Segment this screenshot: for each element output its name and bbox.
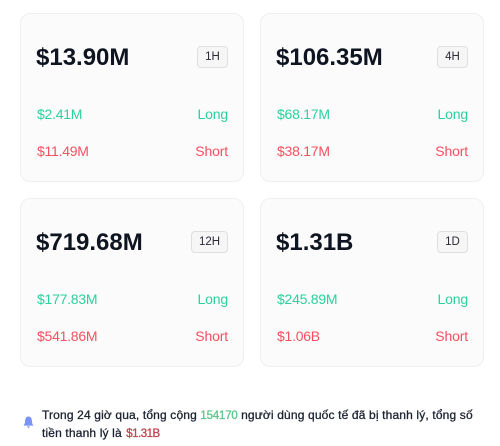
total 4H: $106.35M — [276, 44, 383, 71]
panel: 4H liquidations — [260, 13, 484, 182]
short row 12H: $541.86M — [37, 328, 97, 344]
summary note: Trong 24 giờ qua, tổng cộng 154170 người dùng quốc tế đã bị thanh lý, tổng số — [42, 408, 473, 422]
badge 4H — [437, 46, 468, 68]
total 1H: $13.90M — [36, 44, 129, 71]
long row 4H: Long — [437, 106, 468, 122]
short row 4H: Short — [435, 143, 468, 159]
badge 1D: 1D — [445, 236, 460, 248]
long row 1H: Long — [197, 106, 228, 122]
long row 1H: $2.41M — [37, 106, 82, 122]
long row 1D — [277, 291, 468, 307]
short row 1H: Short — [195, 143, 228, 159]
total 1D: $1.31B — [276, 229, 353, 256]
badge 1D — [437, 231, 468, 253]
short row 1D — [277, 328, 468, 344]
total 12H: $719.68M — [36, 229, 143, 256]
badge 12H: 12H — [199, 236, 220, 248]
long row 1D: Long — [437, 291, 468, 307]
long row 1D: $245.89M — [277, 291, 337, 307]
long row 12H — [37, 291, 228, 307]
icon: bell — [24, 416, 34, 428]
short row 1H — [37, 143, 228, 159]
panel: 1H liquidations — [20, 13, 244, 182]
badge 12H — [191, 231, 228, 253]
short row 4H — [277, 143, 468, 159]
long row 1H — [37, 106, 228, 122]
badge 1H — [197, 46, 228, 68]
long row 12H: $177.83M — [37, 291, 97, 307]
panel: 12H liquidations — [20, 198, 244, 367]
short row 1H: $11.49M — [37, 143, 89, 159]
summary note — [42, 408, 473, 440]
panel: 1D liquidations — [260, 198, 484, 367]
short row 1D: $1.06B — [277, 328, 320, 344]
short row 1D: Short — [435, 328, 468, 344]
short row 12H — [37, 328, 228, 344]
long row 12H: Long — [197, 291, 228, 307]
badge 1H: 1H — [205, 51, 220, 63]
long row 4H: $68.17M — [277, 106, 330, 122]
summary note: tiền thanh lý là $1.31B — [42, 426, 160, 440]
short row 4H: $38.17M — [277, 143, 330, 159]
badge 4H: 4H — [445, 51, 460, 63]
short row 12H: Short — [195, 328, 228, 344]
long row 4H — [277, 106, 468, 122]
